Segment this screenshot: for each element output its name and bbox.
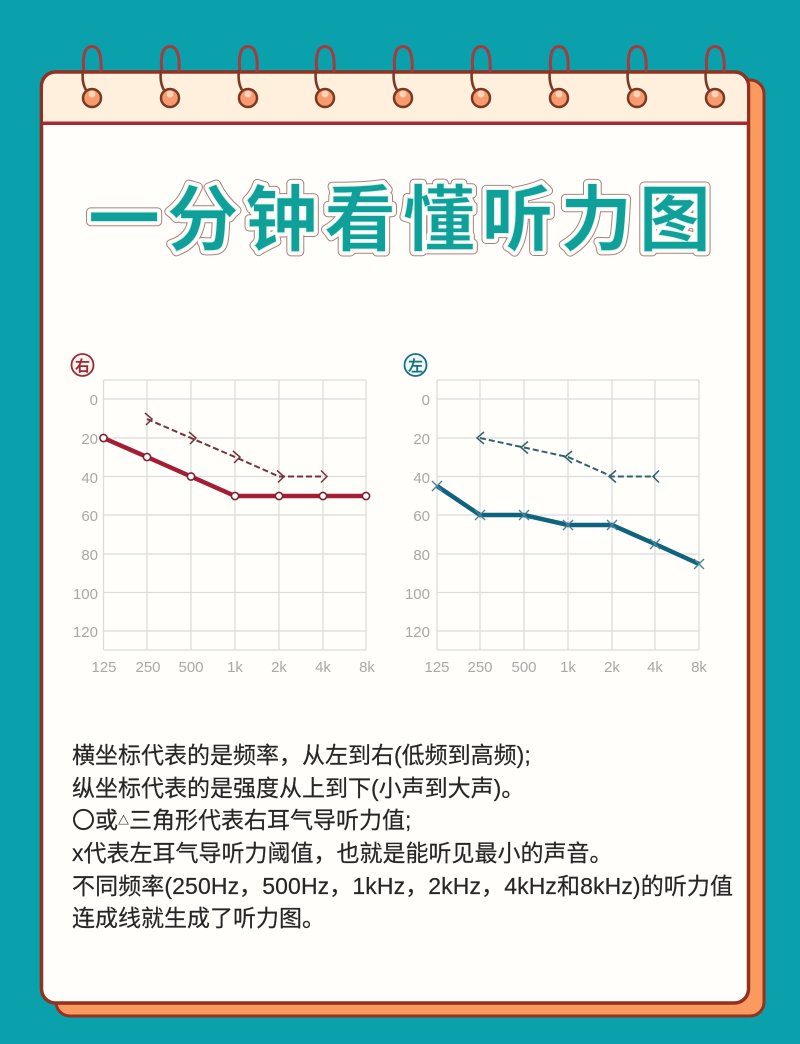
- x axis labels: 4k: [315, 659, 331, 676]
- explanation text: 不同频率(250Hz，500Hz，1kHz，2kHz，4kHz和8kHz)的听力值: [72, 873, 733, 899]
- explanation text: 纵坐标代表的是强度从上到下(小声到大声)。: [72, 775, 524, 801]
- y axis labels: [405, 392, 430, 641]
- bone conduction dashed line: [480, 438, 655, 476]
- explanation text: 〇或: [72, 807, 118, 833]
- ring 6: [472, 46, 490, 107]
- y axis labels: 0: [90, 392, 98, 409]
- x axis labels: 500: [178, 659, 204, 676]
- y axis labels: 60: [81, 508, 98, 525]
- ring 4: [316, 46, 334, 107]
- y axis labels: 40: [81, 470, 98, 487]
- bone conduction markers: [477, 432, 659, 482]
- x axis labels: [91, 659, 375, 676]
- y axis labels: 40: [413, 470, 430, 487]
- y axis labels: 20: [413, 431, 430, 448]
- y axis labels: 100: [405, 586, 430, 603]
- air conduction markers: [100, 434, 370, 500]
- explanation text: 横坐标代表的是频率，从左到右(低频到高频);: [72, 742, 531, 768]
- ring 1: [83, 46, 101, 107]
- ring 7: [550, 46, 568, 107]
- header divider: [42, 122, 748, 125]
- grid: [104, 380, 366, 650]
- title: 一分钟看懂听力图: [88, 181, 711, 261]
- explanation text: 连成线就生成了听力图。: [72, 905, 325, 931]
- y axis labels: 120: [73, 624, 98, 641]
- air conduction line: [437, 486, 699, 564]
- x axis labels: 250: [467, 659, 493, 676]
- notebook header band: [43, 74, 747, 123]
- chart: left ear audiogram: [404, 354, 707, 676]
- explanation text: 三角形代表右耳气导听力值;: [129, 807, 411, 833]
- explanation text: △: [118, 814, 129, 827]
- x axis labels: 250: [135, 659, 161, 676]
- explanation text: [72, 742, 733, 931]
- title: 一分钟看懂听力图: [88, 181, 711, 261]
- ring 2: [161, 46, 179, 107]
- y axis labels: [73, 392, 98, 641]
- explanation text: x代表左耳气导听力阈值，也就是能听见最小的声音。: [72, 840, 612, 866]
- badge: right ear: 右: [75, 358, 90, 375]
- ring 5: [394, 46, 412, 107]
- y axis labels: 60: [413, 508, 430, 525]
- y axis labels: 80: [81, 547, 98, 564]
- air conduction x markers: [432, 481, 704, 569]
- x axis labels: [424, 659, 707, 676]
- x axis labels: 500: [511, 659, 537, 676]
- x axis labels: 8k: [691, 659, 707, 676]
- ring 3: [239, 46, 257, 107]
- bone conduction markers: [145, 413, 327, 482]
- ring 8: [628, 46, 646, 107]
- title: 一分钟看懂听力图: [88, 181, 711, 261]
- notebook back page: [56, 80, 764, 1016]
- y axis labels: 120: [405, 624, 430, 641]
- y axis labels: 0: [422, 392, 430, 409]
- x axis labels: 2k: [604, 659, 620, 676]
- grid: [437, 380, 699, 650]
- badge: left ear: [404, 354, 426, 376]
- notebook front page: [42, 72, 748, 1003]
- x axis labels: 125: [91, 659, 117, 676]
- x axis labels: 4k: [647, 659, 663, 676]
- badge: right ear: [72, 354, 94, 376]
- x axis labels: 1k: [560, 659, 576, 676]
- y axis labels: 100: [73, 586, 98, 603]
- air conduction line: [104, 438, 366, 496]
- spiral rings: [83, 46, 724, 107]
- x axis labels: 8k: [359, 659, 375, 676]
- y axis labels: 20: [81, 431, 98, 448]
- chart: right ear audiogram: [72, 354, 375, 676]
- bone conduction dashed line: [147, 419, 323, 476]
- y axis labels: 80: [413, 547, 430, 564]
- x axis labels: 2k: [271, 659, 287, 676]
- ring 9: [706, 46, 724, 107]
- x axis labels: 125: [424, 659, 450, 676]
- x axis labels: 1k: [227, 659, 243, 676]
- badge: left ear: 左: [408, 358, 423, 375]
